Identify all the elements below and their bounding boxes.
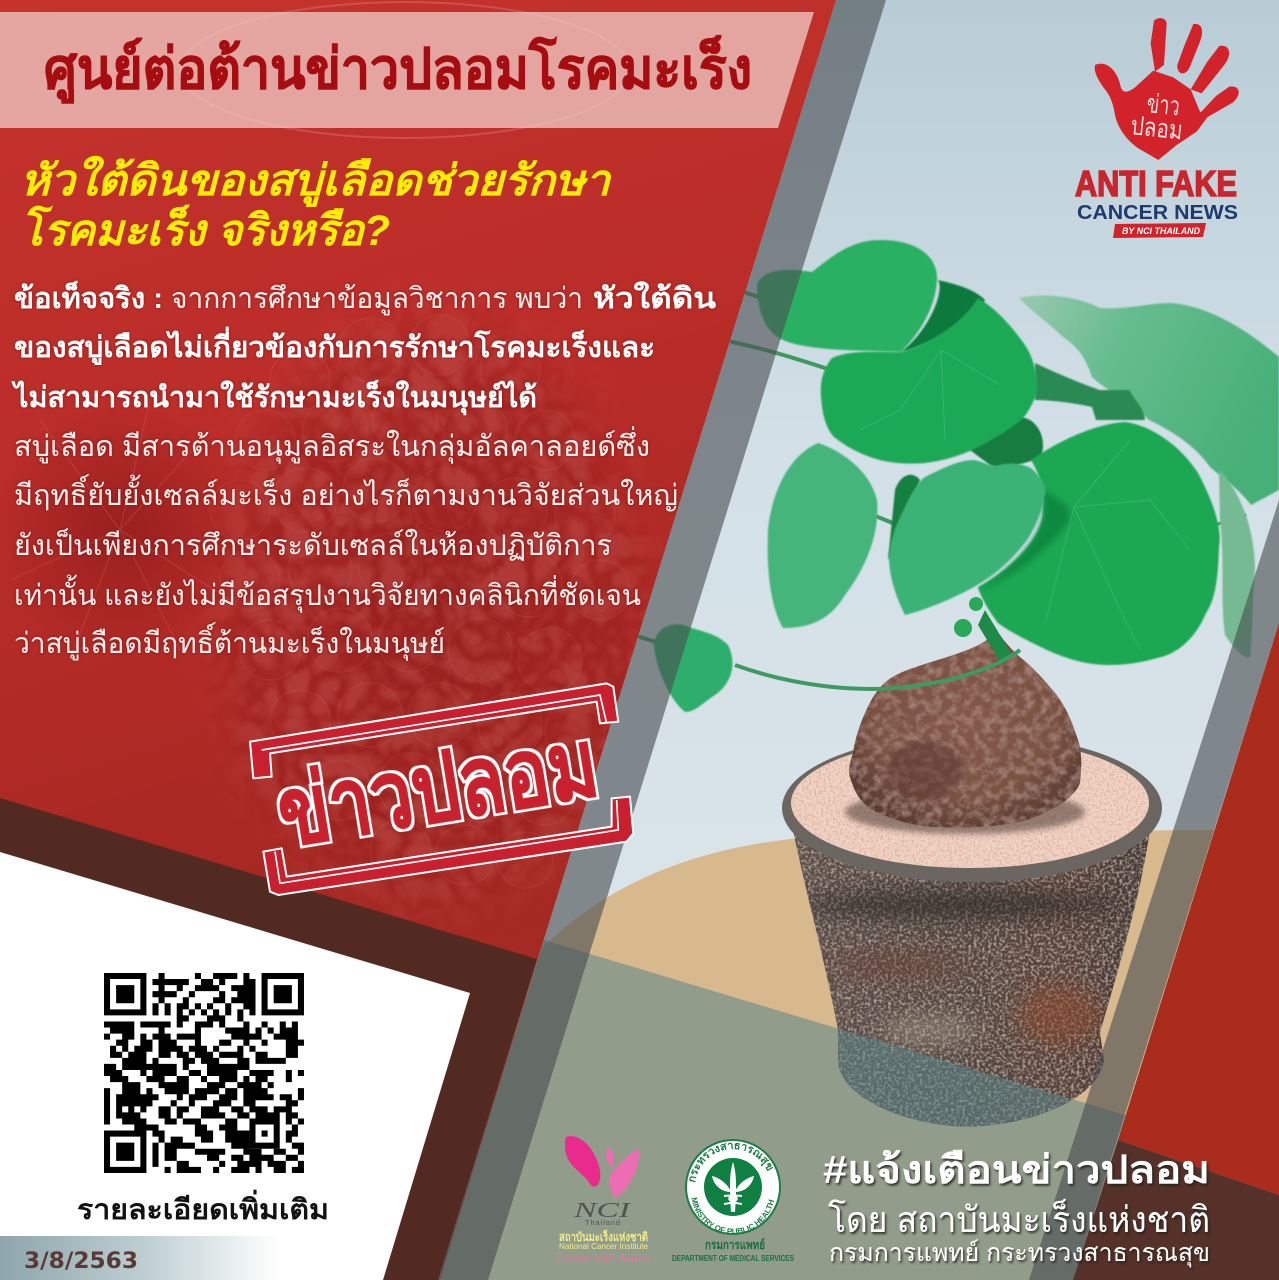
wall [525,0,1279,1000]
leaf: pale left [768,443,877,628]
body text: ไม่สามารถนำมาใช้รักษามะเร็งในมนุษย์ได้ [11,379,537,415]
seal [685,1139,781,1235]
red corner right [1118,623,1279,1195]
headline question [20,155,612,255]
title band [0,12,814,128]
icon: pink butterfly [565,1136,639,1198]
headline question: หัวใต้ดินของสบู่เลือดช่วยรักษา [20,155,612,207]
body text: เท่านั้น และยังไม่มีข้อสรุปงานวิจัยทางคลินิกที่ชัดเจน [14,574,641,613]
qr caption: รายละเอียดเพิ่มเติม [77,1189,329,1225]
leaf: small bottom left [654,624,732,712]
hand text [1129,88,1184,145]
tuber overstem [735,650,1020,689]
logo: national cancer institute: Thailand [585,1218,621,1227]
teal translucent overlay bottom [438,940,1135,1280]
by nci thailand tag [1113,223,1206,238]
tuber shadow patch [887,742,963,798]
cancer news wordmark: CANCER NEWS [1077,202,1238,224]
white panel [0,852,470,1280]
headline question: โรคมะเร็ง จริงหรือ? [20,204,390,255]
hashtag credit: #แจ้งเตือนข่าวปลอม [823,1149,1210,1192]
seal text bottom: MINISTRY OF PUBLIC HEALTH [691,1197,774,1233]
title text: ศูนย์ต่อต้านข่าวปลอมโรคมะเร็ง [44,34,752,104]
plant stems [640,293,1245,642]
leaf: top [757,240,937,352]
logo: anti fake cancer news [1075,18,1239,238]
body text: สบู่เลือด มีสารต้านอนุมูลอิสระในกลุ่มอัลคาลอยด์ซึ่ง [14,426,650,464]
hashtag credit: โดย สถาบันมะเร็งแห่งชาติ [828,1197,1210,1240]
stamp inner lines [262,695,618,883]
body text: ว่าสบู่เลือดมีฤทธิ์ต้านมะเร็งในมนุษย์ [14,622,445,661]
leaf: right narrow edge-on [1219,470,1255,658]
nci script: NCI [572,1198,632,1222]
leaf veins [860,350,1190,650]
body text: มีฤทธิ์ยับยั้งเซลล์มะเร็ง อย่างไรก็ตามงานวิจัยส่วนใหญ่ [14,474,678,512]
fake news stamp [250,683,633,895]
plant photograph [430,0,1279,1280]
seal text top: กระทรวงสาธารณสุข [689,1142,773,1182]
hashtag credit [823,1149,1210,1268]
dark brown corner right [1073,1140,1279,1280]
hand text: ปลอม [1129,110,1184,145]
tuber shadow on gravel [845,790,1085,834]
leaf: large center [821,298,1037,464]
body text: หัวใต้ดิน [593,281,716,315]
logo: national cancer institute [556,1136,651,1264]
stamp text: ข่าวปลอม [270,710,605,866]
pot rim [782,734,1162,882]
tuber [849,633,1081,828]
gray diagonal band left [438,0,886,1280]
gray diagonal band right [1029,500,1279,1280]
icon: red hand [1095,18,1239,160]
wooden table [440,830,1279,1280]
small sprouts [954,597,1012,665]
gravel [791,752,1149,868]
red background with cancer cell texture [0,0,836,1280]
leaf: dark back leaves [888,280,1145,560]
dark brown wedge left [0,798,537,1280]
hashtag credit: กรมการแพทย์ กระทรวงสาธารณสุข [829,1239,1210,1268]
pot body [793,830,1150,1130]
logo: anti fake cancer news: BY NCI THAILAND [1122,226,1200,237]
stamp bottom bracket [263,797,633,895]
leaf: upper right pale [1019,295,1279,505]
body text: ของสบู่เลือดไม่เกี่ยวข้องกับการรักษาโรคมะเร็งและ [14,326,655,365]
anti fake wordmark: ANTI FAKE [1075,163,1237,204]
leaf: large right [978,422,1220,665]
body text [11,280,716,661]
body text: จากการศึกษาข้อมูลวิชาการ พบว่า [171,283,583,316]
logo: national cancer institute: National Cancer Institute [559,1242,649,1251]
qr code [104,973,304,1173]
body text: ยังเป็นเพียงการศึกษาระดับเซลล์ในห้องปฏิบัติการ [14,527,612,562]
department english: DEPARTMENT OF MEDICAL SERVICES [672,1254,795,1263]
leaf: heart center [889,460,1045,615]
department thai: กรมการแพทย์ [705,1238,765,1252]
leaf shadow [978,490,1070,590]
logo: national cancer institute: สถาบันมะเร็งแห่งชาติ [559,1229,648,1244]
logo: ministry of public health [672,1139,795,1263]
date strip [0,1236,280,1280]
stamp top bracket [250,683,618,778]
date text: 3/8/2563 [24,1249,138,1274]
body text: ข้อเท็จจริง : [14,280,163,315]
hand text: ข่าว [1145,88,1181,121]
logo: national cancer institute: Power with Action [556,1250,651,1264]
